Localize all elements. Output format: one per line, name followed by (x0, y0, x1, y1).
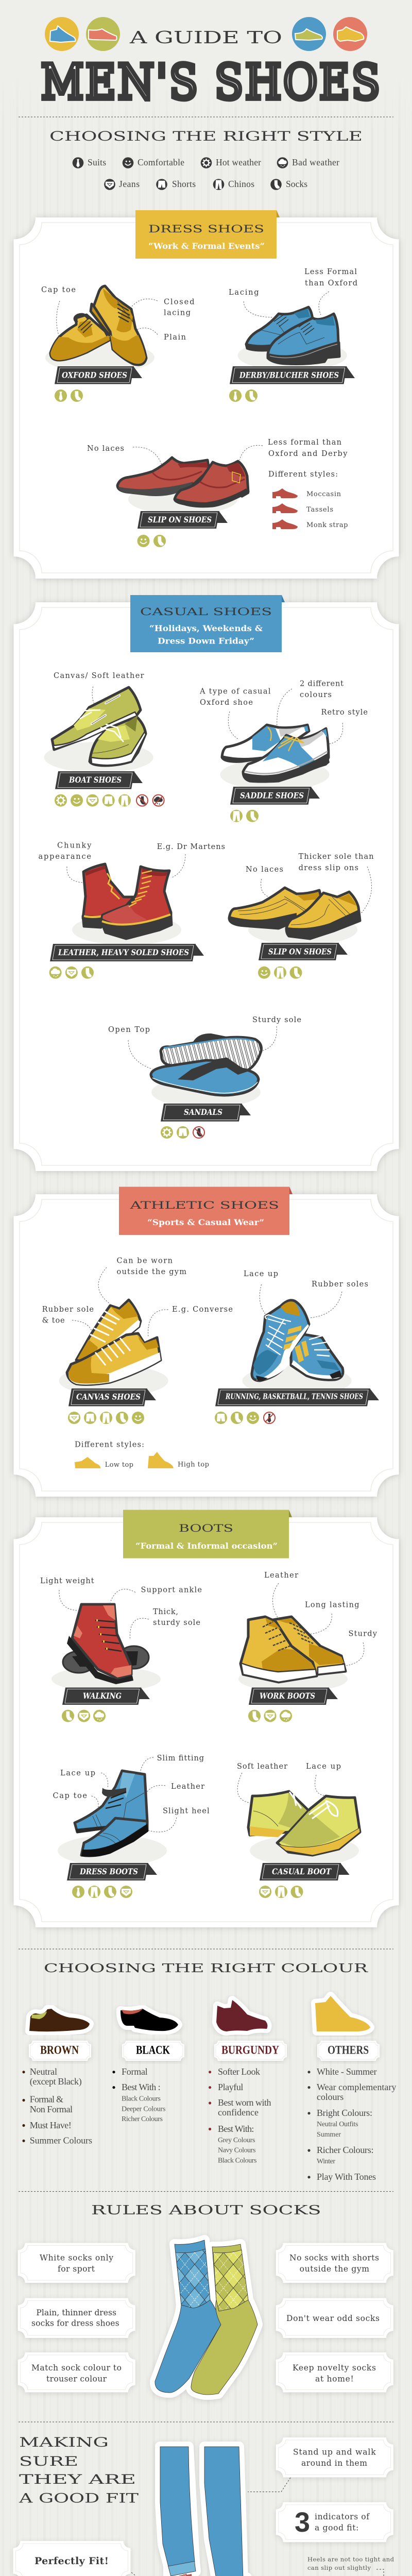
heading tab: athletic shoes (119, 1187, 293, 1235)
banner: derby shoes (230, 366, 355, 384)
icon: coral shoe on green oval (86, 17, 120, 51)
banner: WORK BOOTS (260, 1691, 315, 1701)
annotations (38, 841, 225, 883)
tip: no socks with shorts: outside the gym (300, 2264, 369, 2274)
different styles: low top and high top: Different styles: (75, 1441, 144, 1449)
list: black (112, 2066, 165, 2123)
list: others: Wear complementary (317, 2082, 396, 2092)
annotations (54, 672, 144, 706)
left leg (150, 2447, 196, 2576)
annotations: A type of casual (199, 687, 271, 696)
annotations: Closed (164, 298, 195, 307)
heading tab: casual shoes: “Holidays, Weekends & (149, 623, 263, 633)
annotations: Sturdy (348, 1630, 377, 1638)
annotations: Leather (264, 1571, 298, 1580)
icon: burgundy shoe (216, 2000, 267, 2031)
tip: stand up and walk (276, 2437, 393, 2477)
illustration: boat shoes (52, 687, 146, 766)
list: brown: Must Have! (30, 2120, 72, 2130)
list: others: Bright Colours: (317, 2108, 372, 2118)
annotations: Lacing (229, 289, 259, 297)
annotations: appearance (38, 853, 91, 861)
list: others: colours (317, 2092, 344, 2102)
tip: keep novelty socks at home: Keep novelty socks (293, 2363, 376, 2372)
tip: white socks only for sport: for sport (58, 2264, 95, 2274)
list: burgundy: Navy Colours (218, 2147, 255, 2155)
heading tab: dress shoes: DRESS SHOES (148, 223, 264, 235)
annotations: Cap toe (53, 1792, 87, 1800)
section: choosing the right colour (22, 1962, 396, 2182)
banner: WALKING (83, 1691, 122, 1701)
banner (68, 1388, 156, 1406)
illustration: legs in jeans and boots (150, 2447, 261, 2576)
illustration: canvas shoes (67, 1300, 161, 1384)
heading: a guide to: A GUIDE TO (129, 27, 282, 47)
indicators: Heels are not too tight and (307, 2555, 394, 2563)
tip: match sock colour (18, 2352, 135, 2393)
label: burgundy (214, 2041, 287, 2061)
legend icons: Chinos (228, 179, 254, 189)
icon: black shoe (121, 2009, 178, 2031)
different styles: low top and high top (75, 1441, 209, 1469)
tip: match sock colour: trouser colour (46, 2375, 107, 2384)
annotations: sturdy sole (153, 1619, 200, 1627)
annotations: Sturdy sole (252, 1016, 301, 1024)
tip: plain thinner dress socks: socks for dress shoes (31, 2319, 119, 2328)
list: others: White - Summer (317, 2066, 377, 2077)
annotations: Lace up (60, 1769, 95, 1777)
tip: keep novelty socks at home (276, 2352, 393, 2393)
icon: low top (75, 1457, 100, 1468)
heading tab: boots: “Formal & Informal occasion” (135, 1541, 278, 1551)
list: brown: Non Formal (30, 2104, 73, 2114)
banner: CASUAL BOOT (272, 1867, 332, 1876)
heading: THEY ARE (19, 2472, 136, 2487)
legend icons: Suits (88, 157, 106, 167)
annotations: Oxford shoe (200, 699, 253, 707)
list: burgundy: Softer Look (218, 2066, 260, 2077)
heading tab: casual shoes: CASUAL SHOES (140, 605, 272, 618)
list: brown: (except Black) (30, 2076, 82, 2087)
legend icons: Socks (286, 179, 307, 189)
icon: tassels (272, 503, 298, 513)
annotations: Light weight (40, 1577, 94, 1585)
heading tab: dress shoes: “Work & Formal Events” (148, 241, 265, 251)
annotations: Slim fitting (157, 1754, 204, 1762)
item: canvas shoes (42, 1257, 233, 1424)
legend icons: Bad weather (292, 157, 339, 167)
illustration: slip on dress shoes (117, 457, 249, 507)
icon: yellow shoe on coral oval (333, 17, 367, 51)
annotations (53, 1754, 210, 1832)
heading: CHOOSING THE RIGHT COLOUR (44, 1962, 368, 1975)
indicators: can slip out slightly (307, 2564, 371, 2571)
tip: plain thinner dress socks (18, 2298, 135, 2338)
annotations: colours (300, 691, 332, 699)
illustration: walking boots (63, 1604, 149, 1684)
tip: 3 indicators of a good fit: 3 (295, 2507, 310, 2538)
annotations: Retro style (321, 708, 368, 717)
list: burgundy: Playful (218, 2082, 243, 2092)
banner: slip on shoes: SLIP ON SHOES (148, 515, 212, 524)
annotations: Rubber soles (312, 1280, 368, 1289)
different styles: low top and high top: High top (178, 1461, 209, 1469)
annotations: Lace up (306, 1762, 341, 1771)
heading tab: athletic shoes: “Sports & Casual Wear” (147, 1217, 264, 1227)
list: others (307, 2066, 396, 2182)
list: others: Play With Tones (317, 2172, 376, 2182)
banner (67, 1863, 157, 1880)
illustration: saddle shoes (222, 725, 330, 783)
tip: stand up and walk: Stand up and walk (293, 2447, 376, 2456)
heading tab: athletic shoes: ATHLETIC SHOES (129, 1199, 279, 1211)
tip: perfectly fit (13, 2541, 131, 2576)
annotations: No laces (246, 866, 283, 874)
usage icons (55, 794, 164, 807)
item: oxford shoes (41, 286, 195, 402)
annotations: Leather (171, 1783, 204, 1791)
illustration: chunky boots (83, 864, 171, 939)
banner: saddle shoes: SADDLE SHOES (240, 790, 304, 801)
tip: don't wear odd socks (276, 2298, 393, 2338)
legend icons: Jeans (119, 179, 140, 189)
annotations (199, 680, 368, 744)
label: black (122, 2041, 184, 2061)
usage icons (49, 967, 94, 979)
tip: white socks only for sport: White socks only (40, 2253, 113, 2263)
usage icons (68, 1412, 144, 1424)
usage icons (72, 1886, 132, 1898)
annotations (41, 286, 195, 342)
banner: boat shoes (55, 771, 143, 789)
label: black: BLACK (136, 2044, 170, 2057)
icon: high top (148, 1452, 174, 1468)
illustration: work boots (241, 1617, 346, 1682)
list: brown (22, 2066, 92, 2146)
annotations: Thicker sole than (299, 853, 374, 861)
legend icons: Comfortable (138, 157, 184, 167)
annotations: E.g. Dr Martens (157, 843, 225, 851)
different styles: low top and high top: Low top (105, 1461, 133, 1469)
indicators (266, 2555, 394, 2576)
tip: match sock colour: Match sock colour to (31, 2363, 122, 2372)
annotations: Cap toe (41, 286, 76, 294)
illustration: argyle socks (155, 2240, 258, 2395)
illustration: casual slip ons (229, 888, 360, 940)
annotations: E.g. Converse (172, 1306, 233, 1314)
list: black: Black Colours (122, 2095, 161, 2103)
banner: oxford shoes (55, 366, 142, 384)
heading tab: boots: BOOTS (179, 1522, 233, 1534)
tip: 3 indicators of a good fit: indicators of (315, 2512, 370, 2521)
illustration: running shoes (252, 1300, 343, 1381)
legend icons: Hot weather (216, 157, 261, 167)
item: casual boot (237, 1762, 360, 1898)
item: slip on dress shoes (87, 438, 348, 547)
label: burgundy: BURGUNDY (221, 2044, 279, 2057)
illustration: dress boots (75, 1771, 148, 1857)
annotations: Slight heel (163, 1807, 210, 1816)
annotations: dress slip ons (299, 864, 358, 872)
annotations: Different styles: (268, 470, 338, 479)
banner (62, 1688, 150, 1705)
banner: LEATHER, HEAVY SOLED SHOES (58, 947, 189, 957)
annotations: Soft leather (237, 1762, 287, 1771)
heading: CHOOSING THE RIGHT STYLE (49, 129, 363, 144)
icon: green shoe on blue oval (292, 17, 326, 51)
different styles list: Monk strap (306, 521, 348, 529)
banner: SLIP ON SHOES (268, 947, 332, 956)
icon: moccasin (272, 488, 298, 498)
list: burgundy: confidence (218, 2107, 259, 2117)
banner (161, 1104, 251, 1122)
list: burgundy: Best With: (218, 2124, 254, 2134)
label: brown (29, 2041, 91, 2061)
banner: derby shoes: DERBY/BLUCHER SHOES (239, 370, 339, 380)
icon: yellow shoe (315, 1996, 370, 2031)
usage icons (248, 1710, 292, 1722)
annotations: outside the gym (116, 1268, 186, 1276)
annotations: than Oxford (305, 279, 357, 287)
annotations: Long lasting (305, 1601, 359, 1609)
annotations: Less Formal (304, 268, 357, 276)
list: black: Formal (122, 2066, 148, 2077)
list: burgundy: Best worn with (218, 2097, 271, 2108)
annotations: lacing (164, 309, 191, 317)
list: black: Best With : (122, 2082, 161, 2092)
annotations: Canvas/ Soft leather (54, 672, 144, 680)
panel: casual shoes (13, 595, 399, 1171)
banner: saddle shoes (230, 787, 320, 805)
banner: oxford shoes: OXFORD SHOES (62, 370, 127, 380)
heading: MAKING (19, 2435, 109, 2450)
annotations: Less formal than (268, 438, 341, 447)
label: others (317, 2041, 380, 2061)
banner (215, 1388, 379, 1406)
usage icons (259, 1886, 303, 1898)
annotations: Thick, (153, 1608, 178, 1616)
heading: SURE (19, 2454, 78, 2469)
tip: no socks with shorts: No socks with shorts (289, 2253, 379, 2263)
list: others: Neutral Outfits (317, 2121, 358, 2128)
annotations: Plain (164, 333, 186, 342)
annotations: 2 different (300, 680, 344, 688)
tip: no socks with shorts (276, 2243, 393, 2283)
different styles list (272, 488, 348, 529)
legend icons (73, 157, 339, 190)
icon: monk strap (272, 519, 298, 529)
annotations (229, 268, 357, 317)
banner (249, 1688, 338, 1705)
legend icons: Shorts (172, 179, 196, 189)
column: black (112, 2009, 184, 2123)
tip: don't wear odd socks: Don't wear odd socks (286, 2314, 380, 2323)
tip: white socks only for sport (18, 2243, 135, 2283)
annotations: Open Top (108, 1026, 150, 1034)
tip: stand up and walk: around in them (301, 2459, 367, 2468)
panel: dress shoes (13, 210, 399, 579)
label: others: OTHERS (328, 2044, 369, 2057)
heading tab: dress shoes (135, 210, 280, 259)
section: making sure they are a good fit (13, 2435, 394, 2576)
annotations: Lace up (244, 1270, 278, 1278)
usage icons (258, 967, 302, 979)
tip: keep novelty socks at home: at home! (315, 2375, 354, 2384)
annotations (108, 1016, 301, 1069)
annotations: Chunky (57, 841, 92, 850)
banner: CANVAS SHOES (76, 1392, 141, 1401)
annotations (246, 853, 374, 914)
icon: brown shoe (29, 2009, 90, 2031)
icon: blue shoe on yellow oval (45, 17, 79, 51)
column: burgundy (209, 2000, 287, 2165)
usage icons (229, 389, 258, 402)
heading (19, 2435, 139, 2506)
annotations (244, 1270, 368, 1318)
item: boat shoes (44, 672, 164, 807)
list: others: Richer Colours: (317, 2145, 374, 2155)
right leg (204, 2447, 261, 2576)
tip: perfectly fit: Perfectly Fit! (35, 2555, 109, 2567)
item: saddle shoes (199, 680, 368, 822)
list: brown: Formal & (30, 2094, 63, 2105)
heading tab: boots (123, 1510, 292, 1558)
list: brown: Neutral (30, 2066, 57, 2077)
section: rules about socks (18, 2203, 393, 2395)
usage icons (137, 535, 166, 547)
illustration: derby shoes (246, 307, 339, 364)
list: others: Summer (317, 2131, 341, 2139)
annotations: & toe (42, 1317, 65, 1325)
list: black: Richer Colours (122, 2115, 163, 2123)
annotations: Rubber sole (42, 1306, 94, 1314)
banner (50, 944, 204, 961)
annotations (264, 1571, 377, 1666)
annotations (42, 1257, 233, 1337)
different styles list: Moccasin (306, 490, 341, 498)
banner (260, 1863, 350, 1880)
item: walking boots (40, 1577, 202, 1722)
list: others: Winter (317, 2158, 335, 2165)
annotations: Support ankle (141, 1586, 202, 1595)
banner: boat shoes: BOAT SHOES (68, 775, 122, 785)
item: work boots (238, 1571, 377, 1722)
annotations: No laces (87, 445, 124, 453)
usage icons (215, 1412, 275, 1424)
annotations: Can be worn (116, 1257, 173, 1265)
usage icons (62, 1710, 106, 1722)
item: dress boots (53, 1754, 210, 1898)
banner: slip on shoes (138, 511, 228, 529)
banner: DRESS BOOTS (79, 1867, 138, 1876)
annotations: Oxford and Derby (268, 450, 348, 458)
item: sandals (108, 1016, 301, 1139)
usage icons (230, 810, 259, 822)
list: burgundy: Grey Colours (218, 2137, 255, 2144)
heading: RULES ABOUT SOCKS (91, 2203, 321, 2217)
column: others (307, 1996, 396, 2182)
illustration: sandals (151, 1033, 262, 1095)
usage icons (55, 389, 83, 402)
section: choosing the right style (49, 129, 363, 190)
annotations (237, 1762, 341, 1803)
panel: boots (13, 1510, 399, 1927)
usage icons (161, 1126, 204, 1139)
illustration: oxford shoes (50, 286, 146, 365)
list: burgundy (209, 2066, 271, 2165)
panel: athletic shoes (13, 1187, 399, 1497)
item: derby/blucher shoes (229, 268, 357, 402)
list: brown: Summer Colours (30, 2136, 92, 2146)
annotations (87, 438, 348, 479)
banner: RUNNING, BASKETBALL, TENNIS SHOES (225, 1392, 363, 1401)
different styles list: Tassels (306, 506, 333, 514)
item: casual slip on shoes (229, 853, 374, 979)
list: burgundy: Black Colours (218, 2157, 256, 2165)
heading tab: casual shoes (130, 595, 285, 652)
label: brown: BROWN (40, 2044, 79, 2057)
column: brown (22, 2009, 92, 2146)
item: leather heavy soled shoes (38, 841, 225, 979)
illustration: casual boots (248, 1791, 360, 1855)
annotations (40, 1577, 202, 1640)
tip: 3 indicators of a good fit (276, 2502, 393, 2542)
tip: 3 indicators of a good fit: a good fit: (315, 2523, 358, 2533)
list: black: Deeper Colours (122, 2105, 165, 2113)
banner: SANDALS (184, 1107, 222, 1117)
banner (259, 943, 348, 960)
heading tab: casual shoes: Dress Down Friday” (158, 636, 254, 646)
heading: A GOOD FIT (19, 2491, 139, 2506)
item: running, basketball, tennis shoes (215, 1270, 379, 1424)
tip: plain thinner dress socks: Plain, thinner dress (36, 2308, 116, 2317)
header title (41, 17, 382, 110)
